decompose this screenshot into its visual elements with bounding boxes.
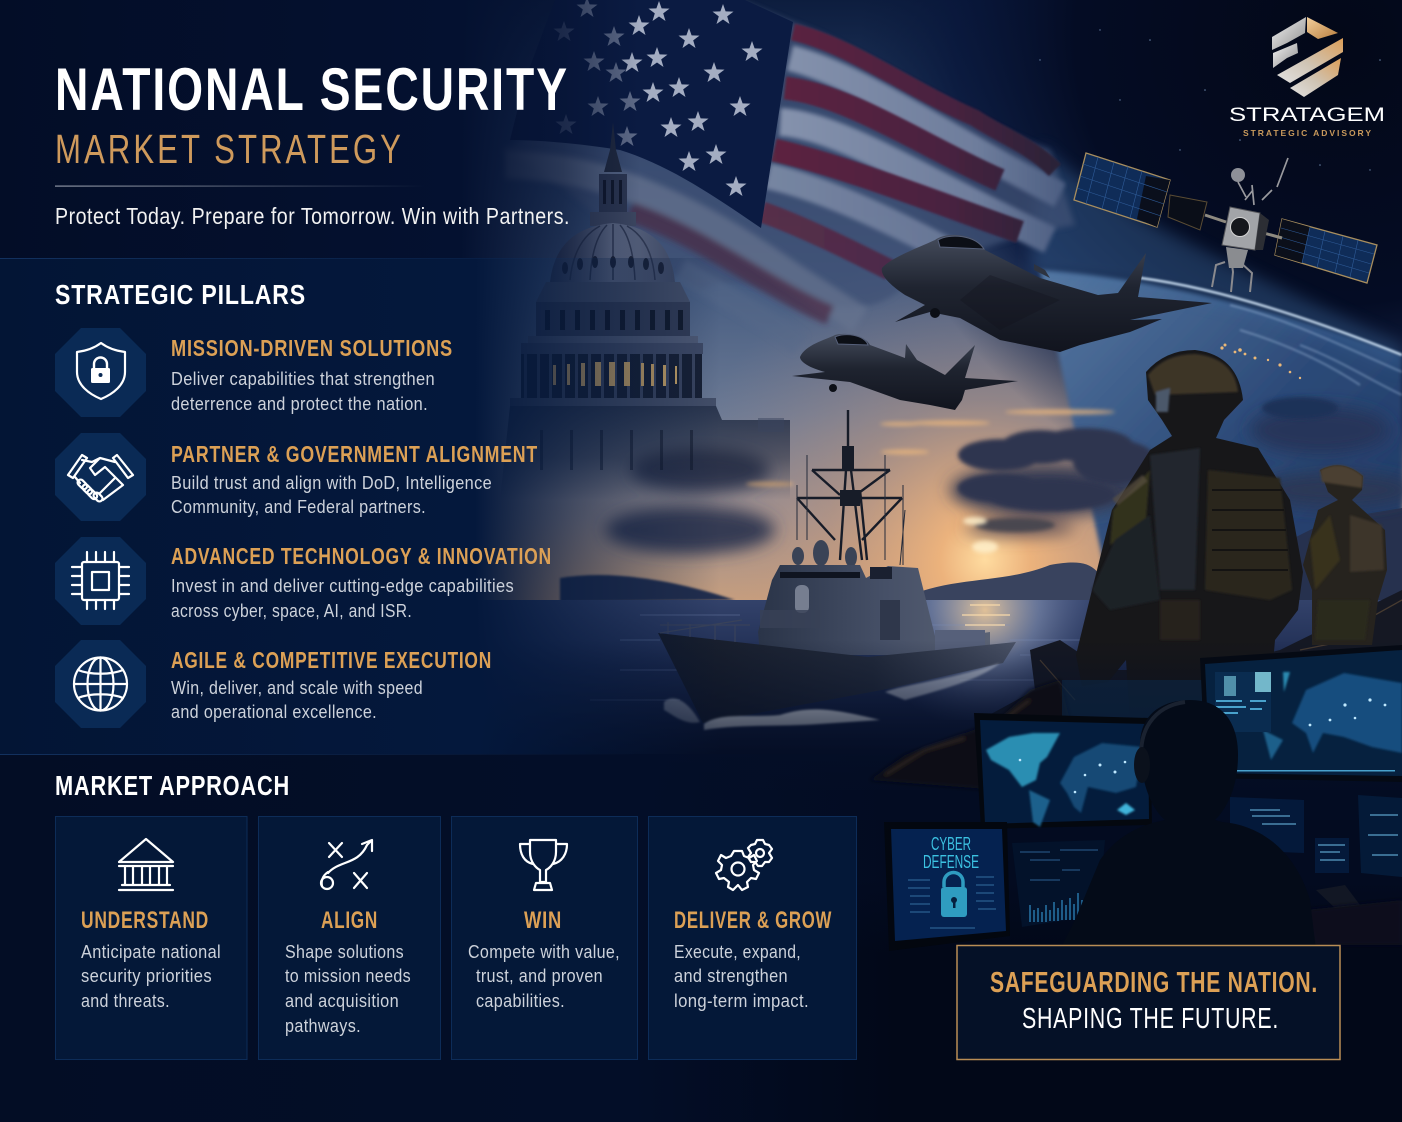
logo	[1229, 17, 1385, 138]
dome	[550, 223, 675, 282]
icon: globe	[55, 640, 146, 728]
card text: trust, and proven	[476, 965, 603, 986]
space stars	[1039, 29, 1381, 171]
card text: to mission needs	[285, 965, 411, 986]
card text: Execute, expand,	[674, 941, 801, 962]
pillar text: and operational excellence.	[171, 701, 377, 722]
sky	[400, 0, 1402, 610]
satellite	[1074, 153, 1377, 292]
card text: security priorities	[81, 965, 212, 986]
f-35 large jet	[882, 235, 1212, 352]
pillar text	[171, 677, 423, 722]
mountains	[560, 508, 1402, 640]
card text: and acquisition	[285, 990, 399, 1011]
pillar text	[171, 575, 514, 621]
card heading: WIN	[524, 907, 562, 934]
us capitol	[500, 122, 790, 500]
card text: and strengthen	[674, 965, 788, 986]
card: deliver and grow	[648, 816, 856, 1060]
desk keyboard	[1316, 885, 1360, 908]
pillar: partner and government alignment	[55, 433, 538, 521]
red stripes	[762, 32, 1055, 270]
pillar text: deterrence and protect the nation.	[171, 393, 428, 414]
title divider	[55, 186, 425, 187]
cyber defense monitor: DEFENSE	[923, 852, 979, 872]
center world map monitor	[974, 713, 1152, 829]
icon: gears	[716, 840, 772, 890]
drum	[536, 282, 690, 302]
soldier rear right	[1303, 465, 1387, 645]
card heading: DELIVER & GROW	[674, 907, 832, 934]
coastal rocks	[980, 590, 1402, 790]
destroyer ship	[658, 410, 1016, 730]
hull	[658, 633, 1016, 723]
monitor wall	[884, 645, 1402, 951]
logo wordmark: STRATAGEM	[1229, 105, 1385, 126]
pillar heading: MISSION-DRIVEN SOLUTIONS	[171, 335, 453, 361]
foreground rocks	[870, 680, 1070, 790]
flag body	[500, 0, 1075, 307]
sunset glow	[560, 230, 1402, 610]
capitol base	[510, 398, 716, 406]
card text	[674, 941, 809, 1011]
cyber defense monitor: CYBER	[931, 834, 971, 854]
padlock	[941, 873, 967, 917]
title	[55, 56, 569, 172]
icon: playbook	[322, 840, 372, 888]
pillar heading: AGILE & COMPETITIVE EXECUTION	[171, 647, 492, 673]
right solar array	[1275, 219, 1377, 283]
card: win	[452, 816, 638, 1060]
card heading: ALIGN	[321, 907, 378, 934]
pillar: advanced technology and innovation	[55, 537, 552, 625]
lower scene fade	[400, 640, 1402, 820]
lower-left waving stripes	[505, 165, 860, 345]
card text: pathways.	[285, 1015, 361, 1036]
market approach heading: MARKET APPROACH	[55, 770, 290, 801]
logo tagline: STRATEGIC ADVISORY	[1243, 128, 1371, 138]
earth limb	[1030, 145, 1402, 640]
card text: Shape solutions	[285, 941, 404, 962]
right world map monitor	[1200, 645, 1402, 782]
ghost monitors behind operator	[1062, 680, 1202, 720]
left solar array	[1074, 153, 1170, 227]
pillar text: Deliver capabilities that strengthen	[171, 368, 435, 389]
landing struts	[1212, 250, 1252, 292]
subtitle: MARKET STRATEGY	[55, 126, 404, 172]
dark panel	[1168, 195, 1207, 230]
pillar text: Community, and Federal partners.	[171, 496, 426, 517]
cyber defense monitor	[884, 822, 1010, 951]
canton	[510, 0, 793, 228]
lit windows	[553, 362, 677, 386]
pillar: mission-driven solutions	[55, 328, 453, 417]
card: understand	[56, 816, 247, 1060]
sea	[400, 600, 1402, 790]
icon: government building	[119, 839, 173, 890]
left panel scrims	[0, 0, 900, 1122]
logo shield	[1272, 17, 1343, 97]
spire and lantern	[604, 122, 622, 172]
pillar text	[171, 472, 492, 517]
american flag	[500, 0, 1075, 345]
pillar heading: ADVANCED TECHNOLOGY & INNOVATION	[171, 543, 552, 569]
card text: Compete with value,	[468, 941, 620, 962]
icon: microchip	[55, 537, 146, 625]
pillar text: Build trust and align with DoD, Intelligence	[171, 472, 492, 493]
pillar text: across cyber, space, AI, and ISR.	[171, 600, 412, 621]
canton stars	[554, 0, 762, 196]
colonnade	[521, 354, 702, 398]
floor fade	[0, 880, 1402, 1122]
title: NATIONAL SECURITY	[55, 56, 569, 123]
deep space corner	[860, 0, 1402, 540]
cloud streaks on earth	[1230, 305, 1402, 395]
card text	[285, 941, 411, 1036]
card text: and threats.	[81, 990, 170, 1011]
clouds	[605, 397, 1402, 554]
f-35 small jet	[792, 334, 1018, 410]
card heading: UNDERSTAND	[81, 907, 209, 934]
mast	[797, 410, 902, 560]
card: align	[258, 816, 440, 1060]
pillar text	[171, 368, 435, 414]
city lights	[1220, 344, 1301, 379]
white stripes	[768, 58, 1060, 265]
icon: shield with lock	[55, 328, 146, 417]
small right monitors	[1230, 797, 1304, 853]
icon: trophy	[520, 840, 567, 890]
card text: Anticipate national	[81, 941, 221, 962]
strategic pillars heading: STRATEGIC PILLARS	[55, 279, 306, 310]
pillar text: Invest in and deliver cutting-edge capabilities	[171, 575, 514, 596]
superstructure	[758, 565, 990, 655]
card text	[81, 941, 221, 1011]
tagline: Protect Today. Prepare for Tomorrow. Win with Partners.	[55, 203, 570, 229]
radar domes	[792, 540, 857, 567]
card text	[468, 941, 620, 1011]
bus connector	[1205, 215, 1226, 222]
analytics chart monitor	[1012, 840, 1105, 927]
pillar: agile and competitive execution	[55, 640, 492, 728]
pillar text: Win, deliver, and scale with speed	[171, 677, 423, 698]
soldier foreground	[1076, 350, 1303, 720]
icon: handshake	[55, 433, 146, 521]
operator silhouette	[1060, 700, 1316, 950]
pillar heading: PARTNER & GOVERNMENT ALIGNMENT	[171, 441, 538, 467]
playbook circle	[321, 877, 333, 889]
callout white line: SHAPING THE FUTURE.	[1022, 1003, 1279, 1035]
card text: long-term impact.	[674, 990, 809, 1011]
card text: capabilities.	[476, 990, 565, 1011]
callout	[957, 946, 1340, 1060]
satellite bus	[1222, 207, 1260, 250]
bow wake	[664, 663, 1000, 730]
